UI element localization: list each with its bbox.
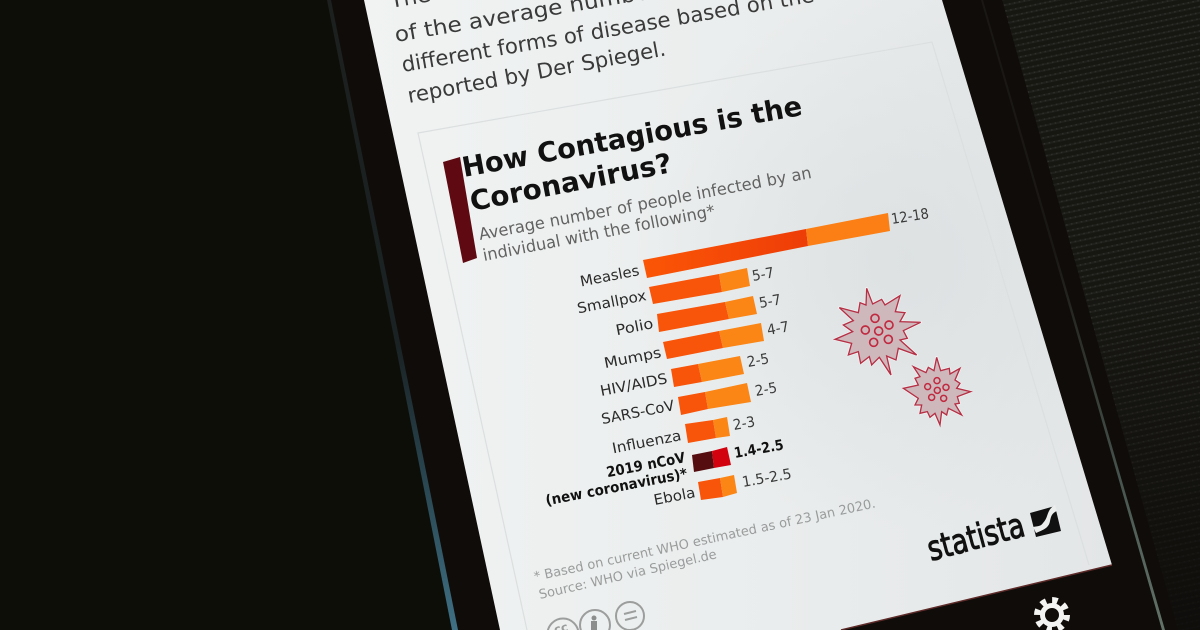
category labels — [544, 263, 697, 509]
phone right edge highlight — [981, 0, 1165, 630]
category labels: HIV/AIDS — [599, 371, 669, 400]
footnote and source: * Based on current WHO estimated as of 23 Jan 2020. — [533, 496, 877, 585]
bar: Ebola — [698, 475, 737, 500]
icon: settings gear — [1038, 600, 1066, 630]
bar: Measles — [643, 213, 890, 278]
category labels: Smallpox — [576, 288, 648, 317]
screen bottom edge — [841, 565, 1112, 630]
value labels: 1.5-2.5 — [741, 466, 793, 491]
bar chart — [643, 213, 890, 500]
icon: small virus — [903, 357, 971, 425]
category labels: 2019 nCoV — [605, 450, 687, 481]
phone body — [328, 0, 1178, 630]
value labels: 4-7 — [766, 319, 790, 339]
category labels: Mumps — [603, 345, 663, 372]
screen shading — [364, 0, 1112, 630]
background: fabric texture — [1002, 0, 1200, 630]
bar: 2019 nCoV — [692, 447, 731, 472]
value labels: 1.4-2.5 — [733, 437, 785, 462]
subtitle: individual with the following* — [481, 201, 716, 265]
text block: article body: reported by Der Spiegel. — [406, 37, 668, 108]
phone left edge highlight — [327, 0, 458, 630]
category labels: (new coronavirus)* — [544, 466, 689, 509]
category labels: Ebola — [652, 485, 697, 509]
phone screen — [364, 0, 1112, 630]
icon: large virus — [835, 288, 921, 375]
value labels: 2-5 — [754, 380, 778, 400]
value labels: 5-7 — [751, 265, 775, 285]
value labels — [732, 206, 930, 491]
bar: SARS-CoV — [678, 383, 751, 415]
title: How Contagious is the — [459, 90, 805, 184]
bar: Mumps — [663, 323, 764, 359]
category labels: SARS-CoV — [600, 398, 676, 428]
value labels: 2-3 — [732, 414, 756, 434]
footnote and source: Source: WHO via Spiegel.de — [538, 547, 718, 603]
fabric lower shadow — [1002, 0, 1200, 630]
bar: Influenza — [685, 417, 730, 443]
subtitle: Average number of people infected by an — [477, 163, 813, 244]
statista wordmark: statista — [923, 505, 1029, 570]
bar: Smallpox — [649, 268, 750, 304]
value labels: 5-7 — [758, 292, 782, 312]
bar: HIV/AIDS — [671, 356, 744, 387]
icon: statista logo — [1030, 505, 1061, 537]
text block: article body — [387, 0, 909, 108]
category labels: Measles — [579, 263, 641, 290]
value labels: 2-5 — [746, 351, 770, 371]
value labels: 12-18 — [890, 206, 930, 228]
panel: chart card — [418, 42, 1089, 630]
category labels: Polio — [614, 316, 655, 339]
bar: Polio — [657, 296, 757, 332]
title accent bar — [443, 157, 477, 263]
title: Coronavirus? — [467, 147, 675, 218]
icon: licence badges — [548, 602, 644, 630]
category labels: Influenza — [611, 428, 683, 457]
